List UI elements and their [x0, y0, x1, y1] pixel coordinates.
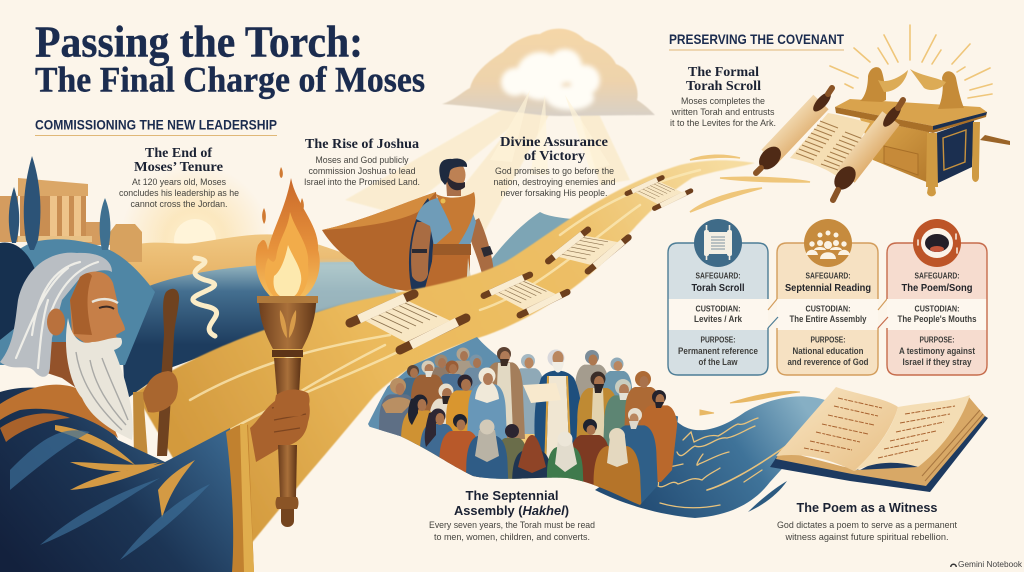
- text block: the formal torah scroll: The Formal: [688, 64, 759, 79]
- panel: safeguard comparison cards: [668, 219, 987, 375]
- text block: the septennial assembly: Assembly (Hakhel): [454, 504, 569, 518]
- card: Septennial Reading: [768, 219, 887, 375]
- card: The Poem/Song: The Poem/Song: [902, 282, 972, 294]
- card: The Poem/Song: A testimony against: [899, 346, 975, 356]
- illustration: promised land landscape: [0, 156, 400, 400]
- text block: the end of Moses' tenure: concludes his leadership as he: [119, 187, 239, 198]
- text block: the formal torah scroll: it to the Levites for the Ark.: [670, 117, 776, 128]
- card: Septennial Reading: CUSTODIAN:: [806, 304, 850, 314]
- card: Torah Scroll: Torah Scroll: [692, 282, 745, 294]
- card: Septennial Reading: PURPOSE:: [810, 336, 846, 344]
- text block: the formal torah scroll: Moses completes the: [681, 95, 765, 106]
- illustration: staff: [157, 289, 179, 456]
- text block: the poem as a witness: witness against future spiritual rebellion.: [785, 531, 948, 542]
- text block: the end of Moses' tenure: Moses’ Tenure: [134, 159, 223, 174]
- text block: the rise of Joshua: Moses and God publicly: [316, 154, 409, 165]
- card: Torah Scroll: SAFEGUARD:: [696, 272, 740, 280]
- illustration: ark of the covenant: [755, 25, 1010, 200]
- text block: the septennial assembly: Every seven years, the Torah must be read: [429, 519, 595, 530]
- illustration: torch: [256, 167, 320, 527]
- text block: the poem as a witness: The Poem as a Witness: [796, 501, 938, 515]
- text block: the septennial assembly: [429, 489, 595, 542]
- card: The Poem/Song: SAFEGUARD:: [914, 272, 960, 280]
- card: The Poem/Song: CUSTODIAN:: [914, 304, 960, 314]
- text block: divine assurance of victory: [494, 134, 616, 198]
- text block: the poem as a witness: [777, 501, 957, 542]
- text block: the rise of Joshua: [304, 136, 420, 187]
- illustration: golden stream: [135, 155, 810, 545]
- illustration: formal torah scroll: [755, 88, 904, 200]
- text block: the rise of Joshua: commission Joshua to lead: [308, 165, 416, 176]
- illustration: scrolls on the stream: [350, 178, 691, 350]
- text block: divine assurance of victory: God promises to go before the: [495, 165, 614, 176]
- text block: the end of Moses' tenure: The End of: [145, 145, 213, 160]
- card: Torah Scroll: Levites / Ark: [694, 314, 742, 324]
- credit: Gemini Notebook: Gemini Notebook: [958, 559, 1023, 569]
- card: Septennial Reading: National education: [792, 346, 864, 356]
- illustration: Moses: [0, 253, 310, 572]
- heading: commissioning the new leadership: COMMISSIONING THE NEW LEADERSHIP: [35, 116, 277, 132]
- text block: the end of Moses' tenure: cannot cross the Jordan.: [130, 198, 228, 209]
- title: The Final Charge of Moses: [35, 60, 425, 100]
- card: The Poem/Song: [878, 219, 987, 375]
- card: Septennial Reading: SAFEGUARD:: [806, 272, 850, 280]
- text block: the septennial assembly: to men, women, children, and converts.: [434, 531, 590, 542]
- text block: the formal torah scroll: [670, 64, 776, 128]
- text block: divine assurance of victory: never forsaking His people.: [500, 187, 608, 198]
- card: The Poem/Song: PURPOSE:: [920, 336, 954, 344]
- heading: preserving the covenant: PRESERVING THE COVENANT: [669, 31, 844, 47]
- card: Septennial Reading: and reverence of God: [788, 357, 868, 367]
- illustration: light rays and cloud: [345, 29, 655, 240]
- text block: the septennial assembly: The Septennial: [466, 489, 558, 503]
- text block: the poem as a witness: God dictates a poem to serve as a permanent: [777, 519, 957, 530]
- title: [35, 18, 425, 100]
- illustration: cherubim: [860, 67, 964, 109]
- text block: the formal torah scroll: Torah Scroll: [686, 78, 761, 93]
- text block: the end of Moses' tenure: [119, 145, 239, 209]
- card: Septennial Reading: Septennial Reading: [785, 282, 871, 294]
- illustration: flame: [256, 167, 320, 298]
- text block: divine assurance of victory: nation, destroying enemies and: [494, 176, 616, 187]
- text block: the formal torah scroll: written Torah and entrusts: [671, 106, 775, 117]
- illustration: teacher reading the scroll: [523, 350, 580, 459]
- illustration: open book of the poem: [770, 387, 988, 492]
- illustration: septennial assembly crowd: [368, 337, 678, 505]
- illustration: poem ribbon with script: [595, 392, 835, 518]
- card: Torah Scroll: Permanent reference: [678, 346, 758, 356]
- text block: divine assurance of victory: of Victory: [524, 148, 585, 163]
- card: The Poem/Song: The People's Mouths: [898, 314, 977, 324]
- illustration: mountains behind Joshua: [470, 212, 592, 290]
- text block: divine assurance of victory: Divine Assurance: [500, 134, 608, 149]
- text block: the rise of Joshua: The Rise of Joshua: [305, 136, 419, 151]
- card: The Poem/Song: Israel if they stray: [902, 357, 972, 367]
- text block: the end of Moses' tenure: At 120 years old, Moses: [132, 176, 226, 187]
- card: Torah Scroll: CUSTODIAN:: [696, 304, 740, 314]
- text block: the rise of Joshua: Israel into the Promised Land.: [304, 176, 420, 187]
- card: Torah Scroll: PURPOSE:: [700, 336, 736, 344]
- card: Torah Scroll: [668, 219, 768, 375]
- illustration: Moses head: [0, 253, 133, 440]
- title: Passing the Torch:: [35, 18, 363, 66]
- card: Septennial Reading: The Entire Assembly: [790, 314, 867, 324]
- illustration: Joshua: [322, 159, 494, 292]
- card: Torah Scroll: of the Law: [698, 357, 738, 367]
